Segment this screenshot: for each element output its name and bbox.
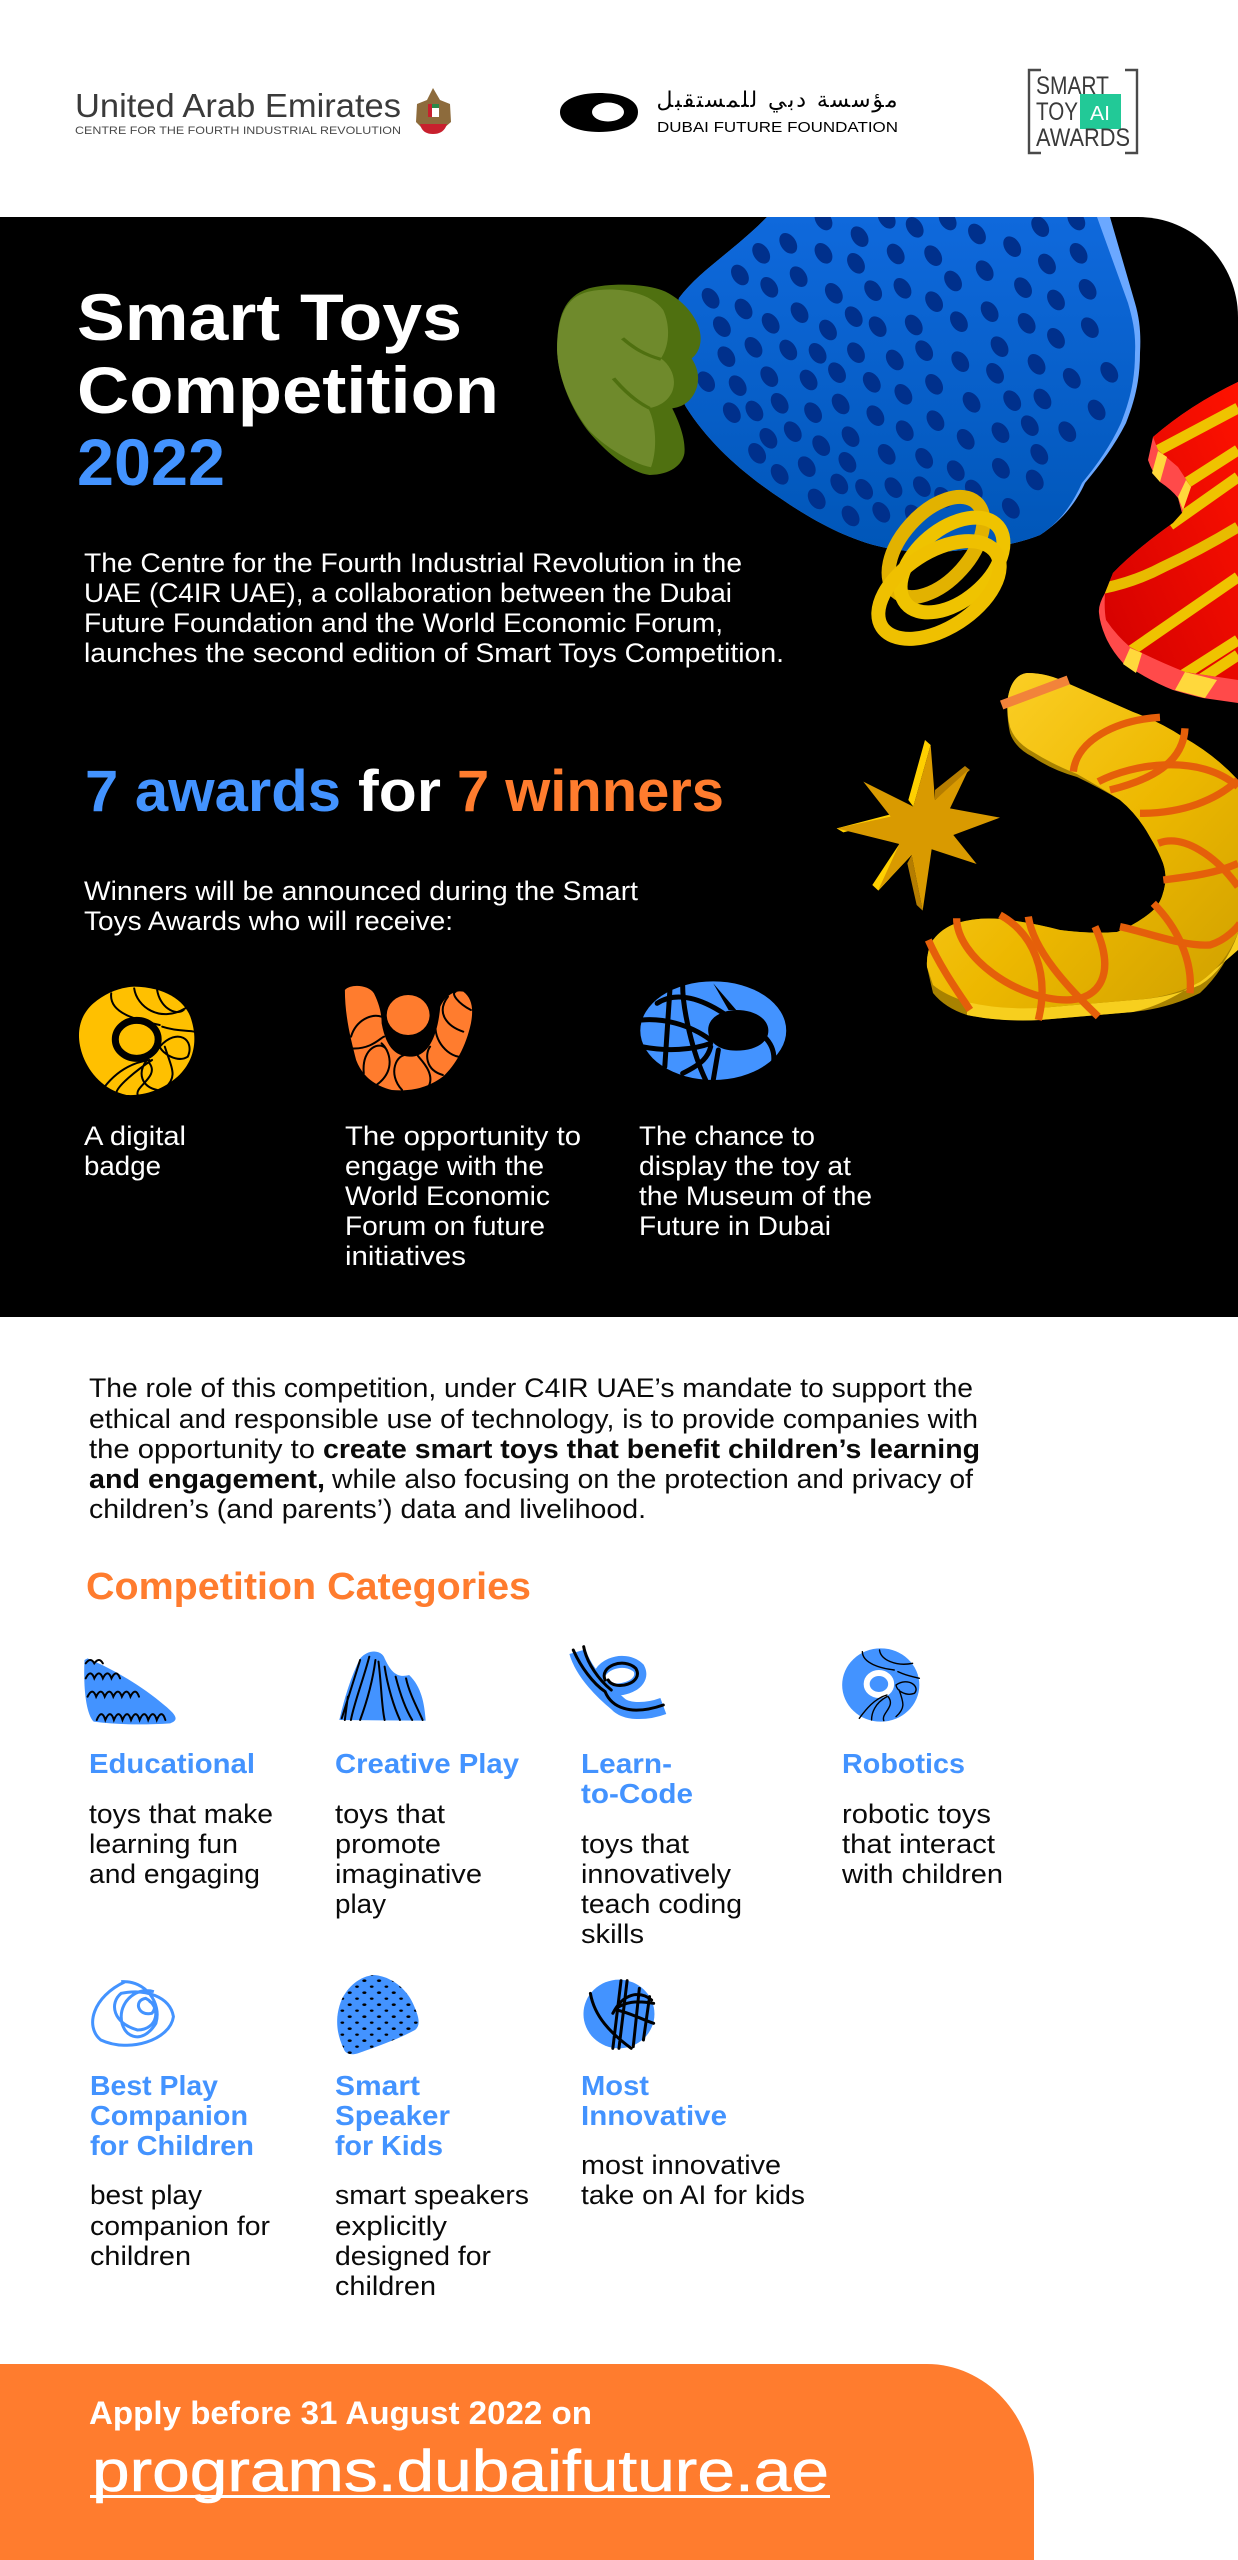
- role paragraph: the opportunity to: [89, 1434, 315, 1464]
- icon: blue globe: [640, 981, 786, 1080]
- category: best play companion: for Children: [90, 2130, 254, 2161]
- banner: apply: Apply before 31 August 2022 on: [89, 2395, 592, 2431]
- role paragraph: while also focusing on the protection and privacy of: [331, 1464, 974, 1494]
- award: engage with WEF: Forum on future: [345, 1211, 545, 1241]
- awards heading: [85, 759, 724, 824]
- category: most innovative: take on AI for kids: [581, 2180, 805, 2210]
- award: museum display: The chance to: [639, 1121, 815, 1151]
- category: best play companion: Companion: [90, 2100, 248, 2131]
- awards heading: 7 winners: [457, 759, 724, 824]
- award: digital badge: badge: [84, 1151, 161, 1181]
- category: smart speaker: explicitly: [335, 2211, 448, 2241]
- role paragraph: and engagement,: [89, 1464, 325, 1494]
- category: learn to code: [573, 1647, 742, 1949]
- awards heading: 7 awards: [85, 759, 341, 824]
- award: museum display: Future in Dubai: [639, 1211, 831, 1241]
- category: smart speaker: [335, 1975, 529, 2301]
- category: educational: toys that make: [89, 1799, 273, 1829]
- icon: ringed disc: [842, 1648, 919, 1722]
- intro text: launches the second edition of Smart Toys Competition.: [84, 638, 784, 668]
- category: robotics: Robotics: [842, 1748, 965, 1779]
- winners text: [84, 876, 639, 936]
- icon: blue scribble: [93, 1982, 173, 2045]
- title: Smart Toys: [77, 280, 462, 354]
- icon: squiggle triangle: [84, 1658, 176, 1724]
- category: learn to code: toys that: [581, 1829, 690, 1859]
- award: engage with WEF: The opportunity to: [345, 1121, 581, 1151]
- intro text: Future Foundation and the World Economic Forum,: [84, 608, 723, 638]
- logo: Smart Toy AI Awards: AWARDS: [1036, 124, 1130, 152]
- category: most innovative: [581, 1980, 805, 2210]
- category: best play companion: children: [90, 2241, 191, 2271]
- category: most innovative: Innovative: [581, 2100, 727, 2131]
- role paragraph: [89, 1373, 980, 1524]
- banner: apply: programs.dubaifuture.ae: [92, 2439, 829, 2504]
- toy: red striped ribbon: [1099, 382, 1238, 703]
- category: learn to code: skills: [581, 1919, 644, 1949]
- category: best play companion: [90, 1982, 270, 2271]
- title: 2022: [77, 425, 225, 499]
- category: educational: learning fun: [89, 1829, 238, 1859]
- category: learn to code: innovatively: [581, 1859, 732, 1889]
- icon: swirl: [573, 1647, 663, 1711]
- category: best play companion: companion for: [90, 2211, 270, 2241]
- award: museum display: the Museum of the: [639, 1181, 872, 1211]
- award: engage with WEF: initiatives: [345, 1241, 466, 1271]
- category: learn to code: teach coding: [581, 1889, 742, 1919]
- award: digital badge: A digital: [84, 1121, 186, 1151]
- winners text: Toys Awards who will receive:: [84, 906, 453, 936]
- role paragraph: The role of this competition, under C4IR UAE’s mandate to support the: [89, 1373, 973, 1403]
- category: robotics: robotic toys: [842, 1799, 991, 1829]
- category: educational: [84, 1658, 273, 1889]
- category: creative play: play: [335, 1889, 387, 1919]
- logo: Dubai Future Foundation: [560, 88, 898, 136]
- toy: yellow banana with orange stitches: [927, 673, 1238, 1020]
- category: most innovative: most innovative: [581, 2150, 781, 2180]
- header logos: [75, 70, 1137, 153]
- category: creative play: Creative Play: [335, 1748, 519, 1779]
- category: learn to code: Learn-: [581, 1748, 672, 1779]
- award: engage with WEF: [345, 986, 581, 1271]
- icon: orange U: [345, 986, 472, 1090]
- toy: green leaf: [557, 285, 701, 475]
- category: educational: Educational: [89, 1748, 255, 1779]
- category: robotics: [841, 1648, 1003, 1889]
- award: engage with WEF: World Economic: [345, 1181, 550, 1211]
- category: creative play: [335, 1651, 519, 1919]
- logo: United Arab Emirates C4IR: United Arab Emirates: [75, 87, 401, 124]
- category: robotics: that interact: [842, 1829, 996, 1859]
- heading: competition categories: Competition Categories: [86, 1566, 531, 1608]
- logo: Smart Toy AI Awards: AI: [1090, 103, 1110, 125]
- logo: Dubai Future Foundation: مؤسسة دبي للمستقبل: [656, 88, 898, 113]
- icon: lined globe: [583, 1980, 654, 2048]
- role paragraph: create smart toys that benefit children’s learning: [323, 1434, 980, 1464]
- category: most innovative: Most: [581, 2070, 649, 2101]
- category: smart speaker: Smart: [335, 2070, 420, 2101]
- icon: striped hill: [339, 1651, 426, 1721]
- category: smart speaker: Speaker: [335, 2100, 450, 2131]
- awards heading: for: [358, 759, 441, 824]
- category: smart speaker: designed for: [335, 2241, 491, 2271]
- category: creative play: toys that: [335, 1799, 446, 1829]
- icon: dotted dome: [337, 1975, 419, 2054]
- category: creative play: imaginative: [335, 1859, 482, 1889]
- category: best play companion: Best Play: [90, 2070, 218, 2101]
- award: museum display: [639, 981, 872, 1241]
- logo: Smart Toy AI Awards: SMART: [1036, 72, 1109, 100]
- role paragraph: ethical and responsible use of technology, is to provide companies with: [89, 1404, 978, 1434]
- award: digital badge: [79, 987, 194, 1181]
- banner: apply: [0, 2364, 1034, 2560]
- category: smart speaker: for Kids: [335, 2130, 443, 2161]
- toy: yellow rings: [871, 490, 1010, 646]
- role paragraph: children’s (and parents’) data and livelihood.: [89, 1494, 646, 1524]
- logo: United Arab Emirates C4IR: [75, 87, 451, 137]
- logo: Dubai Future Foundation: DUBAI FUTURE FOUNDATION: [657, 119, 898, 136]
- 3D toy illustrations: [557, 206, 1238, 1020]
- category: smart speaker: children: [335, 2271, 436, 2301]
- category: best play companion: best play: [90, 2180, 203, 2210]
- icon: yellow badge: [79, 987, 194, 1095]
- logo: Smart Toy AI Awards: TOY: [1036, 98, 1078, 126]
- award: museum display: display the toy at: [639, 1151, 852, 1181]
- title: Competition: [77, 353, 499, 427]
- intro text: UAE (C4IR UAE), a collaboration between the Dubai: [84, 578, 732, 608]
- logo: Smart Toy AI Awards: [1029, 70, 1137, 153]
- category: educational: and engaging: [89, 1859, 260, 1889]
- logo: United Arab Emirates C4IR: CENTRE FOR THE FOURTH INDUSTRIAL REVOLUTION: [75, 125, 401, 137]
- category: learn to code: to-Code: [581, 1778, 693, 1809]
- winners text: Winners will be announced during the Smart: [84, 876, 639, 906]
- category: creative play: promote: [335, 1829, 441, 1859]
- category: smart speaker: smart speakers: [335, 2180, 529, 2210]
- intro text: [84, 548, 784, 668]
- intro text: The Centre for the Fourth Industrial Revolution in the: [84, 548, 742, 578]
- panel: hero: [0, 206, 1238, 1317]
- award: engage with WEF: engage with the: [345, 1151, 544, 1181]
- title: [77, 280, 499, 499]
- toy: golden star: [837, 740, 1000, 911]
- toy: blue dotted disc: [674, 206, 1140, 552]
- category: robotics: with children: [841, 1859, 1003, 1889]
